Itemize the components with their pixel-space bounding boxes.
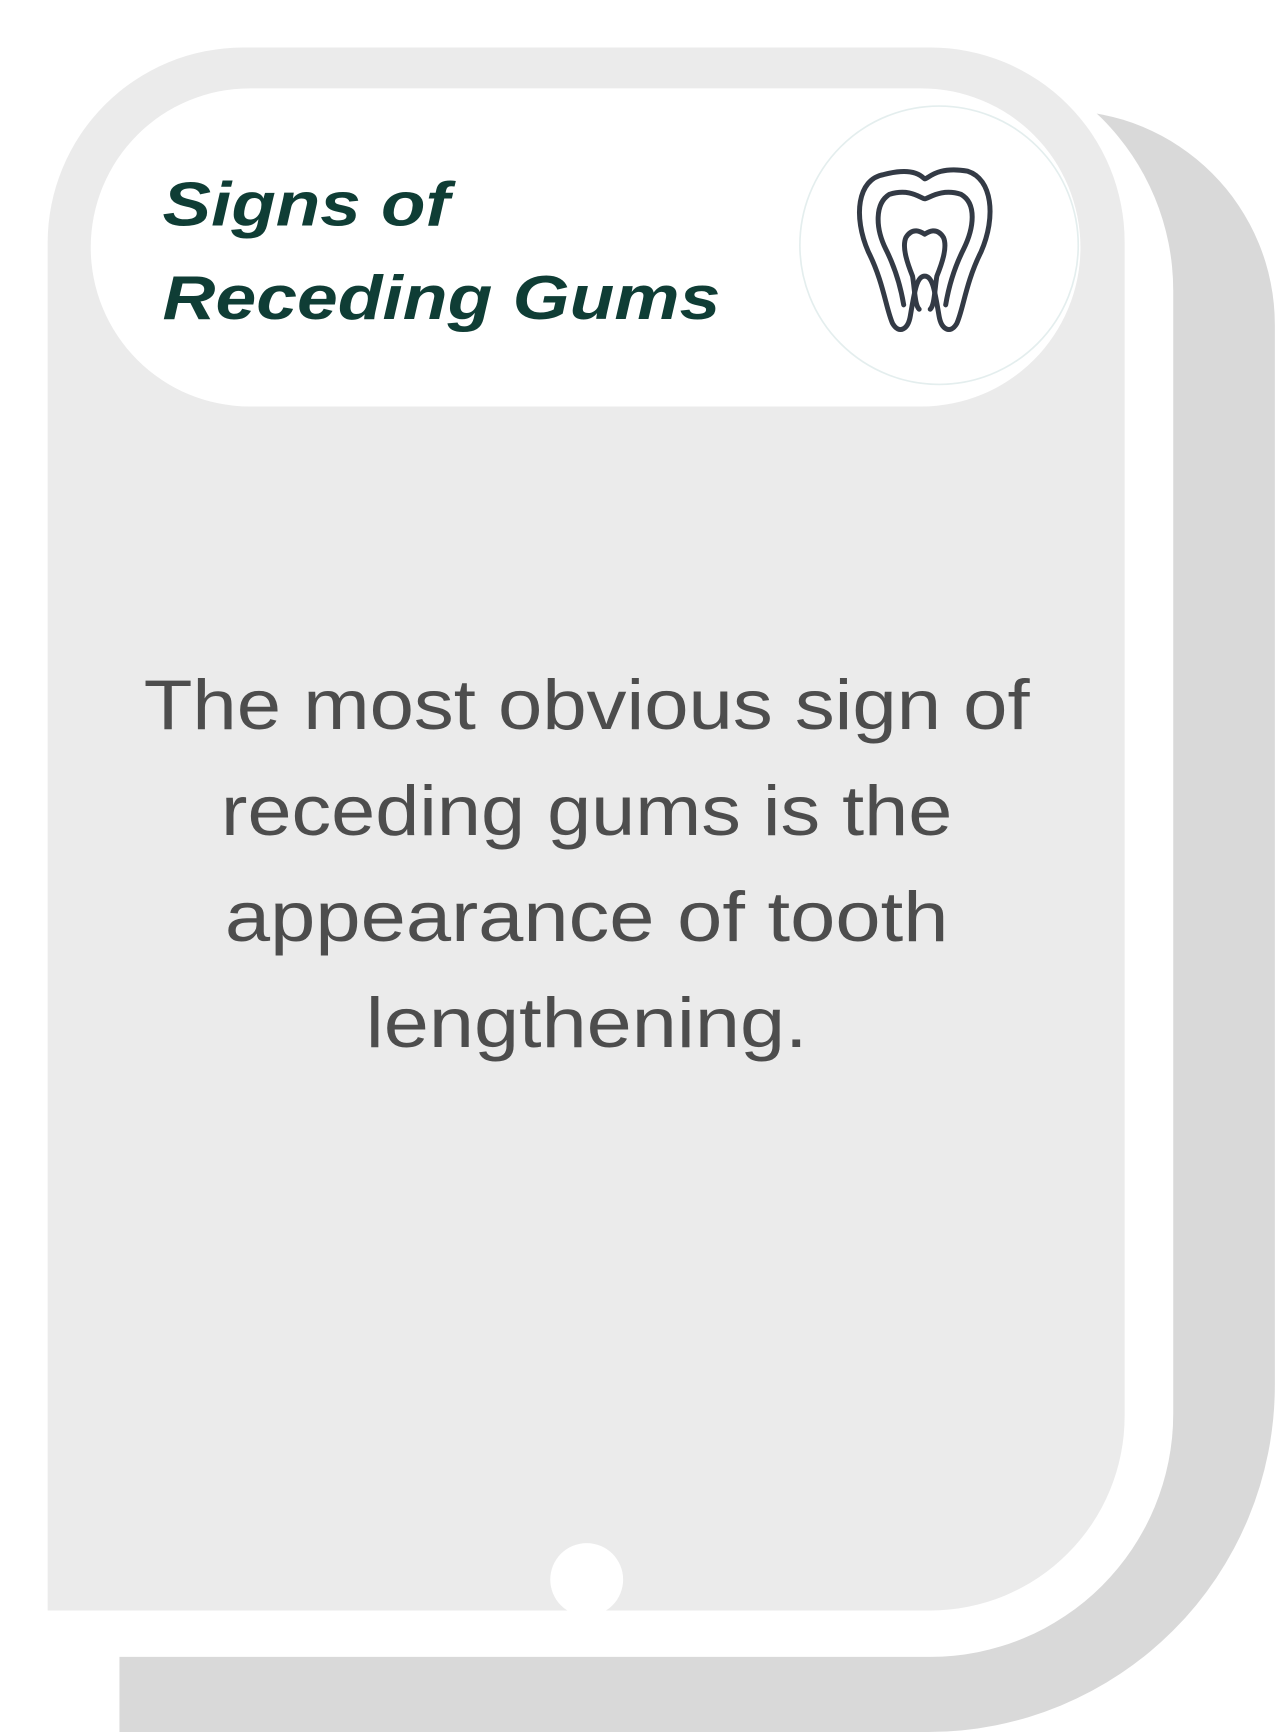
icon: tooth <box>800 106 1078 384</box>
body text: receding gums is the <box>221 771 952 850</box>
title: Signs of <box>163 170 456 239</box>
body text: lengthening. <box>366 983 808 1062</box>
body text: appearance of tooth <box>225 877 948 956</box>
title <box>163 170 720 333</box>
header pill <box>91 88 1080 406</box>
body text: The most obvious sign of <box>144 665 1030 744</box>
title: Receding Gums <box>163 264 720 333</box>
home button <box>550 1543 623 1616</box>
body text <box>144 665 1030 1062</box>
gray card body <box>48 47 1125 1610</box>
